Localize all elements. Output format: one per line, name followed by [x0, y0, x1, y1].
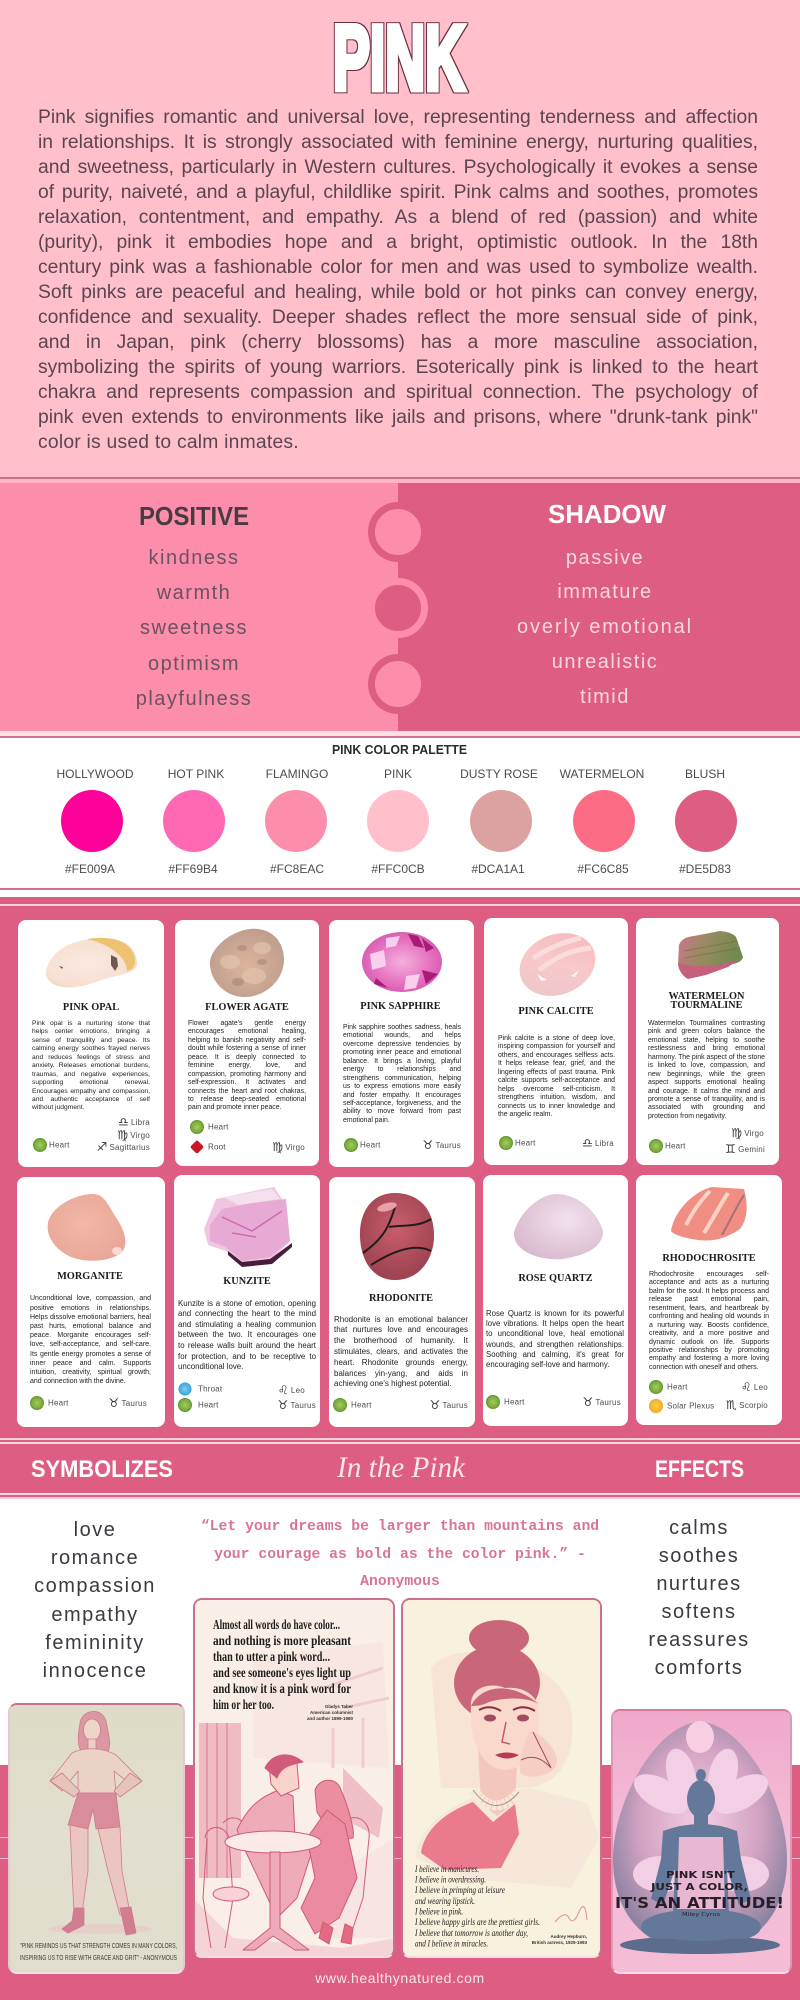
chakra: heart: [346, 1140, 356, 1150]
intro text block: confidence and sexuality. Deeper shades reflect the more sensual side of pink,: [38, 307, 758, 328]
stone description: to release deep-seated emotional: [188, 1096, 306, 1103]
attribution: American columnist: [310, 1710, 353, 1715]
chakra: heart: [32, 1398, 42, 1408]
icon: rhodochrosite stone: [670, 1185, 748, 1242]
attribution: British actress, 1929-1993: [532, 1940, 587, 1945]
swatch: dusty rose: DUSTY ROSE: [460, 767, 538, 781]
stone description: heart. Rhodonite grounds energy,: [334, 1358, 468, 1367]
swatch: hot pink: #FF69B4: [168, 862, 218, 876]
swatch: flamingo: FLAMINGO: [266, 767, 328, 781]
stone description: unconditional love.: [178, 1362, 243, 1371]
script title: In the Pink: [336, 1451, 466, 1484]
swatch: hollywood: #FE009A: [65, 862, 115, 876]
symbolizes word list: compassion: [34, 1575, 156, 1597]
card: pink sapphire: Heart: [360, 1140, 381, 1150]
stone description: Rose Quartz is known for its powerful: [486, 1309, 624, 1318]
stone description: Watermelon Tourmalines contrasting: [648, 1020, 765, 1027]
stone description: [648, 1020, 765, 1120]
stone description: calming energy soothes frayed nerves: [32, 1045, 150, 1052]
stone description: Rhodonite is an emotional balancer: [334, 1315, 468, 1324]
stone description: promote a sense of tranquility, and is: [648, 1096, 765, 1103]
attribution: [307, 1704, 353, 1721]
stone name: WATERMELON: [669, 990, 744, 1002]
intro text block: and sweetness, particularly in Western cultures. Psychologically it evokes a sense: [38, 157, 758, 178]
stone description: Flower agate's gentle energy: [188, 1020, 306, 1027]
effects word list: comforts: [655, 1657, 743, 1679]
stone description: encourages emotional healing,: [188, 1028, 306, 1035]
stone description: [649, 1271, 769, 1372]
egg: [613, 1722, 787, 1952]
stone description: positive relationships by promoting: [649, 1347, 769, 1354]
icon: morganite stone: [48, 1194, 126, 1261]
panel: color palette: [0, 738, 800, 888]
stone description: Pink opal is a nurturing stone that: [32, 1020, 150, 1027]
swatch: hollywood: HOLLYWOOD: [56, 767, 134, 781]
stone description: is linked to love, compassion, and: [648, 1062, 765, 1069]
zodiac: taurus: ♉︎Taurus: [582, 1395, 621, 1409]
stone description: helps overcome self-criticism. It: [498, 1086, 615, 1093]
card: watermelon tourmaline: [636, 918, 779, 1165]
stone description: Pink sapphire soothes sadness, heals: [343, 1024, 461, 1031]
stone description: and authentic acceptance of self: [32, 1096, 150, 1103]
intro text block: in relationships. It is strongly associated with feminine energy, nurturing qualities,: [38, 132, 758, 153]
stone description: restlessness and bring emotional: [648, 1045, 765, 1052]
stone description: [188, 1020, 306, 1111]
believe text: I believe in overdressing.: [414, 1874, 486, 1884]
symbolizes word list: love: [74, 1519, 116, 1541]
stone description: inspiring compassion for yourself and: [498, 1043, 615, 1050]
stone description: connects the heart and root chakras,: [188, 1088, 306, 1094]
picture: meditating figure in egg: [611, 1709, 792, 1974]
believe text: and wearing lipstick.: [415, 1896, 475, 1906]
portrait: [415, 1620, 599, 1888]
stone description: inner peace and calm. Supports: [30, 1360, 151, 1367]
stone description: strengthens communication, helping: [343, 1075, 461, 1082]
attribution: Audrey Hepburn,: [550, 1934, 587, 1939]
chakra: heart: [488, 1396, 498, 1408]
stone description: [343, 1024, 461, 1124]
symbolizes word list: innocence: [43, 1660, 147, 1682]
quote text: [615, 1870, 784, 1918]
linked circles between panels: [368, 502, 428, 714]
woman figure: [48, 1711, 152, 1935]
quote text: him or her too.: [213, 1698, 274, 1713]
shadow word list: unrealistic: [552, 651, 658, 673]
card: pink calcite: [484, 918, 628, 1165]
stone description: the angelic realm.: [498, 1111, 552, 1118]
stone description: Rhodochrosite encourages self-: [649, 1271, 769, 1278]
stone description: and connecting the heart to the mind: [178, 1309, 316, 1318]
stone description: harmony. The pink aspect of the stone: [648, 1054, 765, 1061]
chakra: heart: [334, 1400, 346, 1410]
stone description: encouraging self-love and harmony.: [486, 1360, 609, 1369]
intro text block: century pink was a fashionable color for men and was used to symbolize wealth.: [38, 257, 758, 278]
stone name: TOURMALINE: [671, 1000, 742, 1010]
stone description: [30, 1294, 151, 1385]
figure: [620, 1769, 780, 1954]
panel: crystals background: [0, 906, 800, 1438]
chakra: heart: [650, 1382, 662, 1392]
card: kunzite: Heart: [198, 1400, 219, 1410]
icon: flower agate stone: [210, 928, 284, 997]
stone description: and reduces feelings of stress and: [32, 1054, 150, 1061]
stone name: ROSE QUARTZ: [518, 1273, 593, 1284]
lower pink band: [0, 1765, 800, 2000]
swatch: blush: #DE5D83: [679, 862, 731, 876]
icon: pink sapphire stone: [362, 932, 442, 992]
quote text: IT'S AN ATTITUDE!: [615, 1894, 784, 1912]
footer url: www.healthynatured.com: [315, 1970, 485, 1986]
quote: Anonymous: [360, 1574, 440, 1590]
card: flower agate: Heart: [208, 1122, 229, 1132]
symbolizes word list: [20, 1515, 170, 1685]
effects word list: reassures: [648, 1629, 750, 1651]
chakra: heart: [34, 1140, 46, 1150]
handwritten quote: [20, 1943, 177, 1962]
stone description: the brotherhood of humanity. It: [334, 1336, 468, 1345]
stone description: past hurts, emotional balance and: [30, 1323, 151, 1330]
stone description: confronting and healing old wounds in: [649, 1313, 769, 1320]
stone name: PINK SAPPHIRE: [360, 1001, 441, 1012]
intro text block: and in Japan, pink (cherry blossoms) has a more masculine association,: [38, 332, 758, 353]
stone description: calcite supports self-acceptance and: [498, 1077, 615, 1084]
card: kunzite: [174, 1175, 320, 1427]
stone description: Unconditional love, compassion, and: [30, 1295, 151, 1302]
positive word list: kindness: [149, 547, 239, 569]
effects word list: soothes: [659, 1545, 739, 1567]
card: morganite: Heart: [48, 1398, 69, 1408]
effects word list: nurtures: [656, 1573, 742, 1595]
quote: your courage as bold as the color pink.” -: [214, 1546, 586, 1562]
icon: watermelon tourmaline stone: [678, 931, 743, 979]
card: rhodonite: [329, 1177, 475, 1427]
panel: shadow traits: [398, 483, 800, 731]
believe text: I believe happy girls are the prettiest girls.: [414, 1917, 540, 1927]
icon: rhodonite stone: [359, 1193, 434, 1280]
stone description: [32, 1020, 150, 1111]
stone description: acceptance and acts as a nurturing: [649, 1279, 769, 1286]
stone description: It helps release fear, grief, and the: [498, 1060, 615, 1067]
stone description: pink and green colors balance the: [648, 1028, 765, 1035]
stone description: peace. Morganite encourages self-: [30, 1332, 151, 1339]
card: pink sapphire: [329, 920, 474, 1167]
stone description: emotional pain.: [343, 1117, 390, 1124]
swatch: flamingo: #FC8EAC: [270, 862, 324, 876]
positive word list: warmth: [157, 582, 231, 604]
swatch: blush: [675, 767, 737, 876]
zodiac: taurus: ♉︎Taurus: [429, 1398, 468, 1412]
stone description: self-acceptance, forgiveness, and the: [343, 1100, 461, 1107]
card: rhodochrosite: Solar Plexus: [667, 1402, 714, 1410]
heading: shadow: SHADOW: [548, 499, 666, 529]
symbolizes word list: femininity: [45, 1632, 145, 1654]
card: rose quartz: Heart: [504, 1398, 525, 1406]
symbolizes word list: romance: [51, 1547, 139, 1569]
intro text block: color is used to calm inmates.: [38, 432, 299, 453]
quote text: PINK ISN'T: [666, 1870, 735, 1881]
effects word list: softens: [662, 1601, 736, 1623]
attribution: Gladys Taber: [325, 1704, 353, 1709]
effects word list: calms: [669, 1517, 729, 1539]
intro text block: chakra and represents compassion and spiritual connection. The psychology of: [38, 382, 758, 403]
swatch: pink: [367, 767, 429, 876]
stone description: new beginnings, while the green: [648, 1071, 765, 1078]
card: pink opal: [18, 920, 164, 1167]
header background: [0, 0, 800, 477]
quote text: [213, 1618, 351, 1713]
card: watermelon tourmaline: Heart: [665, 1142, 686, 1150]
stone description: love vibrations. It helps open the heart: [486, 1319, 624, 1328]
zodiac: leo: ♌︎Leo: [741, 1380, 768, 1394]
quote text: Miley Cyrus: [682, 1912, 720, 1918]
stone name: KUNZITE: [223, 1276, 271, 1287]
zodiac: sagittarius: ♐︎Sagittarius: [96, 1140, 150, 1154]
stone description: aspect supports emotional healing: [648, 1079, 765, 1086]
stone description: and connection with the divine.: [30, 1378, 126, 1385]
stone description: a nurturing way. Boosts confidence,: [649, 1322, 769, 1329]
shadow word list: timid: [580, 686, 630, 708]
icon: pink calcite stone: [520, 933, 596, 996]
stone description: traumas, and negative experiences,: [32, 1071, 150, 1078]
chakra: heart: [192, 1122, 202, 1132]
chakra: heart: [650, 1140, 662, 1152]
card: kunzite: Throat: [198, 1384, 222, 1394]
cafe background: [193, 1642, 395, 1958]
stone description: Pink calcite is a stone of deep love,: [498, 1035, 615, 1042]
swatch: watermelon: #FC6C85: [577, 862, 629, 876]
effects word list: [624, 1513, 774, 1683]
stone description: empathy and fostering a more loving: [649, 1355, 769, 1362]
stone description: wounds, and strengthen relationships.: [486, 1340, 624, 1349]
picture: couple at cafe sketch: [193, 1598, 395, 1958]
stone description: and stimulating a healing communion: [178, 1320, 316, 1329]
zodiac: libra: ♎︎Libra: [582, 1136, 614, 1150]
stone description: supporting emotional renewal.: [32, 1079, 150, 1086]
swatch: dusty rose: #DCA1A1: [471, 862, 525, 876]
stone description: Its gentle energy promotes a sense of: [30, 1351, 151, 1358]
stone description: love, self-acceptance, and self-care.: [30, 1341, 151, 1348]
card: pink opal: Heart: [49, 1140, 70, 1150]
stone description: balance. It brings a loving, playful: [343, 1058, 461, 1065]
stone description: connection with oneself and others.: [649, 1364, 759, 1371]
stone description: others, and encourages selfless acts.: [498, 1052, 615, 1059]
stone description: doubt while fostering a sense of inner: [188, 1045, 306, 1052]
swatch: hot pink: [163, 767, 225, 876]
zodiac: taurus: ♉︎Taurus: [422, 1138, 461, 1152]
card: pink calcite: Heart: [515, 1138, 536, 1148]
intro text block: (purity), pink it embodies hope and a bright, optimistic outlook. In the 18th: [38, 232, 758, 253]
stone description: ability to move forward from past: [343, 1108, 461, 1115]
quote text: than to utter a pink word...: [213, 1650, 330, 1665]
stone description: release past emotional pain,: [649, 1296, 769, 1303]
quote text: JUST A COLOR,: [650, 1882, 748, 1893]
swatch: watermelon: [560, 767, 644, 876]
stone description: us to express emotions more easily: [343, 1083, 461, 1090]
picture: audrey hepburn sketch: [401, 1598, 602, 1958]
stone name: RHODONITE: [369, 1293, 433, 1304]
stone description: sense of tranquility and peace. Its: [32, 1037, 150, 1044]
believe text: I believe that tomorrow is another day,: [414, 1928, 528, 1938]
stone description: dynamic outlook on life. Supports: [649, 1338, 769, 1346]
chakra: heart: [500, 1138, 512, 1148]
chakra: heart: [180, 1400, 190, 1410]
stone description: peace. It is deeply connected to: [188, 1054, 306, 1061]
stone name: RHODOCHROSITE: [662, 1253, 756, 1264]
stone description: lingering effects of past trauma. Pink: [498, 1069, 615, 1076]
swatch: watermelon: WATERMELON: [560, 767, 644, 781]
stone description: anxiety. Releases emotional burdens,: [32, 1062, 150, 1069]
panel: positive traits: [0, 483, 398, 731]
shadow word list: overly emotional: [517, 616, 693, 638]
intro text block: relaxation, contentment, and empathy. As a blend of red (passion) and white: [38, 207, 758, 228]
stone description: helps center emotions, bringing a: [32, 1028, 150, 1035]
stone description: emotional wounds, and helps: [343, 1032, 461, 1039]
stone description: [486, 1309, 624, 1370]
swatch: pink: PINK: [384, 767, 412, 781]
stone description: Kunzite is a stone of emotion, opening: [178, 1299, 316, 1308]
card: rhodonite: Heart: [351, 1400, 372, 1410]
stone description: emotional state, helping to soothe: [648, 1037, 765, 1044]
stone description: [498, 1034, 615, 1118]
chakra: solar plexus: [650, 1400, 662, 1412]
card: flower agate: [175, 920, 319, 1166]
believe text: [414, 1864, 540, 1948]
intro text block: Pink signifies romantic and universal love, representing tenderness and affection: [38, 107, 758, 128]
quote: [190, 1514, 610, 1596]
icon: pink opal stone: [46, 938, 137, 988]
stone description: energy to relationships and: [343, 1066, 461, 1073]
zodiac: scorpio: ♏︎Scorpio: [726, 1398, 768, 1412]
believe text: and I believe in miracles.: [415, 1938, 488, 1948]
stone name: MORGANITE: [57, 1271, 123, 1282]
shadow word list: immature: [557, 581, 653, 603]
stone description: for protection, and to be receptive to: [178, 1352, 316, 1360]
stone description: stimulates, clears, and activates the: [334, 1347, 468, 1356]
stone description: strengthens intuition, wisdom, and: [498, 1094, 615, 1101]
swatch: pink: #FFC0CB: [371, 862, 425, 876]
chakra: throat: [180, 1384, 190, 1394]
intro text block: symbolizing the spirits of young warriors. Esoterically pink is linked to the heart: [38, 357, 758, 378]
swatch: hollywood: [56, 767, 134, 876]
stone name: PINK OPAL: [63, 1002, 119, 1013]
stone description: [178, 1299, 316, 1371]
quote text: and know it is a pink word for: [213, 1682, 351, 1697]
stone name: [668, 990, 744, 1010]
attribution: [532, 1934, 587, 1945]
picture: strong woman sketch: [8, 1703, 185, 1974]
card: rhodochrosite: Heart: [667, 1382, 688, 1392]
stone name: FLOWER AGATE: [205, 1002, 289, 1013]
intro text block: [38, 107, 758, 453]
quote text: and see someone's eyes light up: [213, 1666, 351, 1681]
stone description: to unconditional love, heal emotional: [486, 1329, 624, 1338]
chakra: root: [190, 1140, 204, 1154]
positive word list: playfulness: [136, 688, 252, 710]
stone description: without judgment.: [32, 1104, 84, 1111]
stone description: feminine energy, love, and: [188, 1062, 306, 1069]
positive word list: sweetness: [140, 617, 248, 639]
zodiac: gemini: ♊︎Gemini: [725, 1142, 765, 1156]
stone description: Encourages empathy and compassion,: [32, 1088, 150, 1094]
positive word list: optimism: [148, 653, 240, 675]
stone description: and foster empathy. It encourages: [343, 1092, 461, 1098]
positive word list: [136, 547, 252, 710]
stone description: Soothing and calming, it's great for: [486, 1350, 624, 1359]
couple at table: [203, 1755, 369, 1950]
card: flower agate: Root: [208, 1142, 226, 1152]
swatch: blush: BLUSH: [685, 767, 725, 781]
signature: [555, 1907, 587, 1922]
stone description: self-expression. It activates and: [188, 1079, 306, 1086]
stone description: helping to banish negativity and self-: [188, 1037, 306, 1044]
icon: kunzite stone: [204, 1187, 292, 1267]
stone description: and courage. It calms the mind and: [648, 1088, 765, 1094]
zodiac: virgo: ♍︎Virgo: [117, 1128, 150, 1142]
stone description: balances yin-yang, and aids in: [334, 1368, 468, 1378]
symbolizes word list: empathy: [51, 1604, 139, 1626]
card: rhodochrosite: [636, 1175, 782, 1425]
zodiac: libra: ♎︎Libra: [118, 1115, 150, 1129]
stone description: balm for the soul. It helps process and: [649, 1288, 769, 1295]
stone description: positive emotions in relationships.: [30, 1305, 151, 1312]
stone description: pain and promote inner peace.: [188, 1104, 281, 1111]
stone description: achieving one's highest potential.: [334, 1379, 452, 1388]
attribution: and author 1899-1980: [307, 1716, 353, 1721]
believe text: I believe in manicures.: [414, 1864, 479, 1874]
zodiac: virgo: ♍︎Virgo: [731, 1126, 764, 1140]
icon: rose quartz stone: [513, 1193, 603, 1260]
shadow word list: [517, 547, 693, 708]
swatch: hot pink: HOT PINK: [168, 767, 224, 781]
stone description: Helps dissolve emotional barriers, heal: [30, 1314, 151, 1321]
stone name: PINK CALCITE: [518, 1006, 594, 1017]
zodiac: taurus: ♉︎Taurus: [108, 1396, 147, 1410]
shadow word list: passive: [566, 547, 644, 569]
stone description: between the two. It encourages one: [178, 1330, 316, 1339]
stone description: that nurtures love and encourages: [334, 1325, 468, 1334]
stone description: creativity, and a more positive and: [649, 1330, 769, 1337]
zodiac: leo: ♌︎Leo: [278, 1383, 305, 1397]
intro text block: Soft pinks are peaceful and healing, while bold or hot pinks can convey energy,: [38, 282, 758, 303]
stone description: protection from negativity.: [648, 1113, 726, 1120]
quote: “Let your dreams be larger than mountains and: [201, 1519, 599, 1535]
stone description: [334, 1315, 468, 1390]
stone description: overcome depressive tendencies by: [343, 1041, 461, 1048]
stone description: promoting inner peace and emotional: [343, 1049, 461, 1056]
card: rose quartz: [483, 1175, 628, 1426]
swatch: dusty rose: [460, 767, 538, 876]
stone description: to release walls built around the heart: [178, 1341, 316, 1350]
intro text block: pink even extends to environments like jails and prisons, where "drunk-tank pink": [38, 407, 758, 428]
card: morganite: [17, 1177, 165, 1427]
intro text block: of purity, naiveté, and a playful, childlike spirit. Pink calms and soothes, promotes: [38, 182, 758, 203]
swatch: flamingo: [265, 767, 328, 876]
believe text: I believe in pink.: [414, 1906, 463, 1916]
zodiac: virgo: ♍︎Virgo: [272, 1140, 305, 1154]
stone description: connects us to inner knowledge and: [498, 1102, 615, 1110]
petals: [628, 1745, 774, 1892]
stone description: resentment, fears, and heartbreak by: [649, 1305, 769, 1312]
stone description: compassion, promoting harmony and: [188, 1071, 306, 1078]
banner: in the pink: [0, 1444, 800, 1493]
stone description: intuition, creativity, spiritual growth,: [30, 1369, 151, 1376]
believe text: I believe in primping at leisure: [414, 1885, 505, 1895]
quote text: and nothing is more pleasant: [213, 1634, 351, 1649]
zodiac: taurus: ♉︎Taurus: [277, 1398, 316, 1412]
stone description: associated with grounding and: [648, 1104, 765, 1111]
